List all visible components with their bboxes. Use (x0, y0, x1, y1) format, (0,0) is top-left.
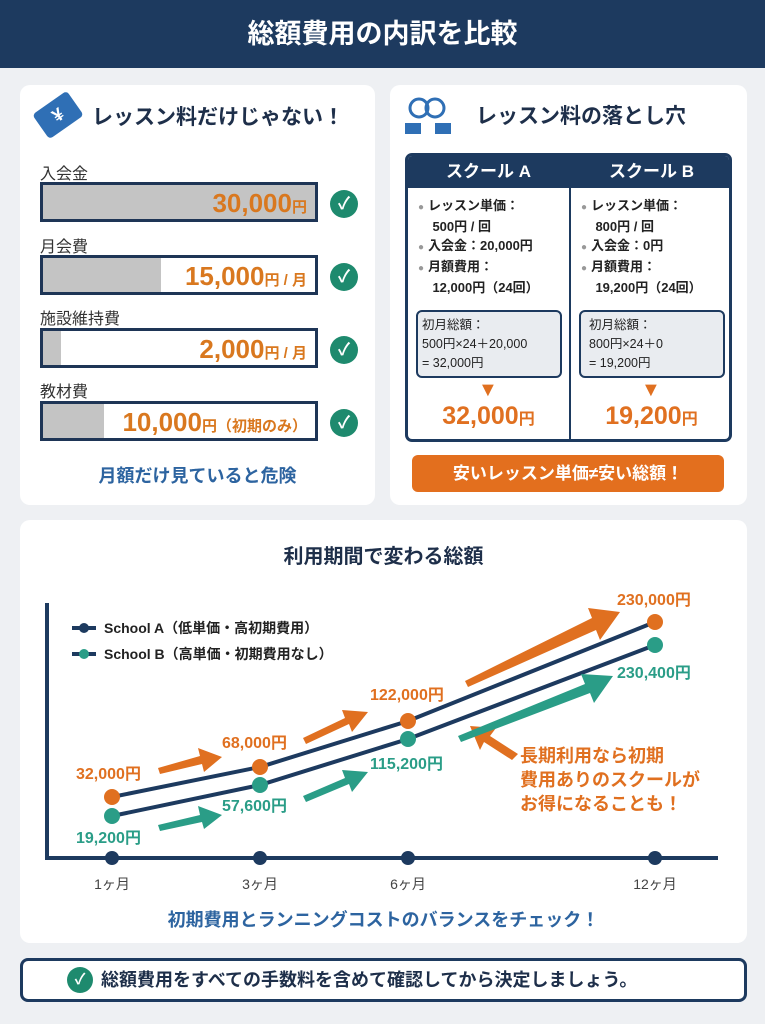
school B: ● 月額費用： (581, 259, 656, 274)
value labels: 68,000円 (222, 735, 287, 752)
school B (579, 162, 725, 430)
text: 15,000円 / 月 (185, 261, 307, 291)
text: 10,000円（初期のみ） (122, 407, 307, 437)
line chart: 3ヶ月 (242, 876, 278, 892)
text: ✓ (338, 340, 350, 359)
school B: 初月総額： (589, 318, 652, 332)
text: ✓ (338, 267, 350, 286)
callout: お得になることも！ (520, 794, 682, 814)
text: ✓ (338, 413, 350, 432)
callout (520, 746, 700, 814)
panel: left (20, 85, 375, 505)
footer: ✓ (75, 971, 85, 988)
school A: ● 月額費用： (418, 259, 493, 274)
line chart: 1ヶ月 (94, 876, 130, 892)
text: 月会費 (40, 239, 88, 256)
icon: magnifiers (405, 98, 451, 134)
school A: スクール A (446, 162, 531, 181)
school A: 12,000円（24回） (432, 280, 539, 295)
item 2 (40, 238, 358, 295)
panel: chart (20, 520, 747, 943)
school B: ● 入会金：0円 (581, 238, 663, 253)
line chart: 230,400円 (617, 665, 691, 682)
school A: 500円 / 回 (432, 219, 491, 234)
header (0, 0, 765, 68)
footer (20, 958, 747, 1002)
line chart: 12ヶ月 (633, 876, 677, 892)
footer: 総額費用をすべての手数料を含めて確認してから決定しましょう。 (101, 970, 637, 990)
legend: School A（低単価・高初期費用） (104, 620, 318, 636)
school B: ● レッスン単価： (581, 198, 682, 213)
arrows (158, 608, 620, 774)
text: ✓ (338, 194, 350, 213)
school A: 500円×24＋20,000 (422, 337, 527, 351)
chart title: 利用期間で変わる総額 (284, 546, 484, 568)
line chart: 115,200円 (370, 756, 443, 773)
line chart: 6ヶ月 (390, 876, 426, 892)
text: 施設維持費 (40, 311, 120, 328)
value labels: 32,000円 (76, 766, 141, 783)
left note: 月額だけ見ていると危険 (98, 466, 296, 486)
item 4 (40, 383, 358, 441)
school B: スクール B (609, 162, 694, 181)
school A: = 32,000円 (422, 356, 484, 370)
banner (412, 455, 724, 492)
line chart: 57,600円 (222, 798, 287, 815)
school A (416, 162, 562, 430)
panel: right (390, 85, 747, 505)
school B: ▼ (641, 379, 661, 401)
school A: ● 入会金：20,000円 (418, 238, 533, 253)
chart note: 初期費用とランニングコストのバランスをチェック！ (168, 910, 599, 930)
legend (72, 620, 333, 662)
school B: 19,200円 (605, 402, 698, 430)
text: 2,000円 / 月 (199, 334, 307, 364)
icon: price tag: ¥ (48, 104, 68, 126)
value labels: 122,000円 (370, 687, 444, 704)
value labels (76, 592, 691, 783)
text: 教材費 (40, 384, 88, 401)
school A: 初月総額： (422, 318, 485, 332)
text: 入会金 (40, 166, 88, 183)
line chart: 19,200円 (76, 830, 141, 847)
school B: 19,200円（24回） (595, 280, 702, 295)
school B: 800円×24＋0 (589, 337, 663, 351)
callout: 費用ありのスクールが (520, 769, 700, 790)
header: 総額費用の内訳を比較 (248, 19, 518, 49)
icon: price tag (32, 91, 84, 139)
heading left: レッスン料だけじゃない！ (92, 106, 344, 129)
comparison table (405, 153, 732, 442)
item 1 (40, 165, 358, 222)
callout: 長期利用なら初期 (520, 746, 664, 766)
school B: = 19,200円 (589, 356, 651, 370)
legend: School B（高単価・初期費用なし） (104, 646, 333, 662)
value labels: 230,000円 (617, 592, 691, 609)
heading right: レッスン料の落とし穴 (476, 105, 686, 128)
banner: 安いレッスン単価≠安い総額！ (453, 464, 683, 483)
school B: 800円 / 回 (595, 219, 654, 234)
school A: ▼ (478, 379, 498, 401)
school A: ● レッスン単価： (418, 198, 519, 213)
school A: 32,000円 (442, 402, 535, 430)
item 3 (40, 310, 358, 368)
text: 30,000円 (212, 188, 307, 218)
